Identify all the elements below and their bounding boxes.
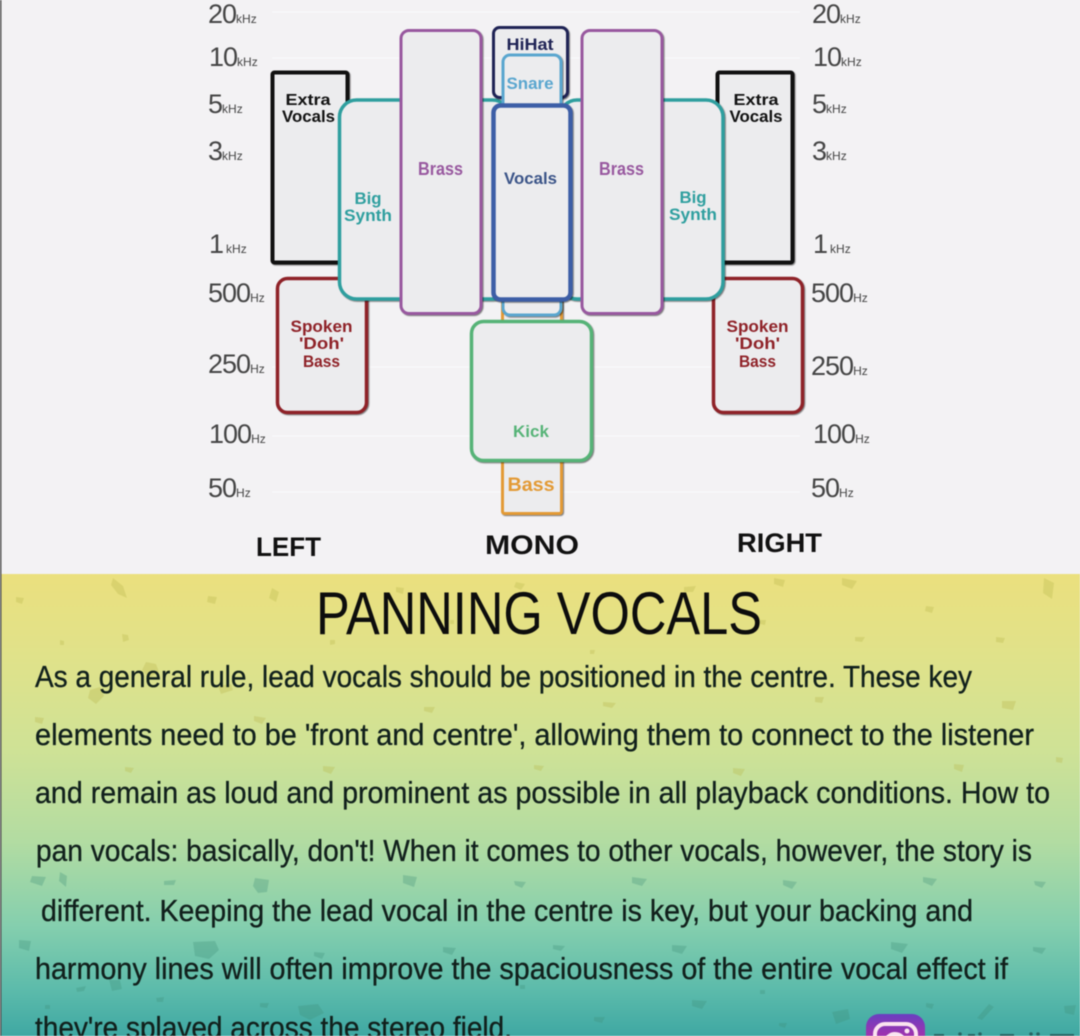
axis label: right: RIGHT [737, 528, 823, 558]
box: left big synth [340, 100, 510, 299]
box: right extra vocals: Vocals [730, 108, 782, 126]
box: bass [502, 300, 562, 514]
box: hihat [494, 28, 568, 98]
box: right spoken doh bass: Bass [739, 353, 776, 371]
box: right extra vocals: Extra [734, 92, 779, 109]
right frequency axis: 500Hz [811, 278, 868, 308]
box: snare [503, 55, 561, 315]
left frequency axis: 3kHz [208, 136, 243, 166]
left frequency axis: 1kHz [209, 229, 247, 259]
box: right brass: Brass [599, 159, 644, 179]
left frequency axis: 100Hz [209, 419, 266, 449]
cropped handle marks beside the instagram logo [934, 1032, 1074, 1036]
box: right big synth: Big [680, 188, 706, 207]
box: right spoken doh bass [714, 278, 802, 412]
right frequency axis: 100Hz [813, 419, 870, 449]
box: left big synth: Big [354, 189, 382, 208]
box: left extra vocals: Extra [286, 92, 331, 109]
box: left extra vocals [272, 72, 348, 262]
box: bass: Bass [508, 475, 554, 496]
box: right big synth [560, 100, 723, 299]
box: left spoken doh bass: 'Doh' [299, 335, 344, 353]
body paragraph: harmony lines will often improve the spaciousness of the entire vocal effect if [35, 951, 1008, 986]
right frequency axis: 5kHz [812, 89, 847, 119]
box: hihat: HiHat [506, 35, 554, 54]
right frequency axis [811, 0, 870, 503]
left frequency axis: 5kHz [208, 89, 243, 119]
right frequency axis: 250Hz [811, 351, 868, 381]
body paragraph: elements need to be 'front and centre', allowing them to connect to the listener [35, 717, 1034, 752]
box: left brass [401, 30, 481, 314]
box: right spoken doh bass: 'Doh' [735, 335, 780, 353]
left frequency axis [208, 0, 266, 503]
box: right extra vocals [718, 72, 792, 262]
text panel background [2, 574, 1080, 1036]
chart background [0, 0, 1080, 574]
left frequency axis: 50Hz [208, 473, 251, 503]
box: left extra vocals: Vocals [282, 108, 335, 126]
right frequency axis: 3kHz [812, 136, 847, 166]
right frequency axis: 50Hz [811, 473, 854, 503]
box: snare: Snare [506, 74, 554, 93]
box: left brass: Brass [418, 159, 463, 179]
box: vocals: Vocals [504, 169, 557, 188]
axis label: mono: MONO [485, 530, 579, 560]
box: kick [472, 322, 592, 460]
box: left spoken doh bass: Bass [303, 353, 340, 371]
box: vocals [494, 106, 570, 300]
left frequency axis: 10kHz [209, 42, 258, 72]
icon: instagram logo, cropped by the page edge [866, 1014, 925, 1036]
right frequency axis: 1kHz [813, 229, 851, 259]
body paragraph: As a general rule, lead vocals should be positioned in the centre. These key [35, 659, 972, 694]
box: right big synth: Synth [669, 205, 717, 224]
title: PANNING VOCALS [316, 580, 762, 647]
left frequency axis: 500Hz [208, 278, 265, 308]
axis label: left: LEFT [256, 532, 321, 562]
right frequency axis: 10kHz [813, 42, 862, 72]
body paragraph [35, 659, 1050, 1036]
box: kick: Kick [513, 422, 550, 441]
box: left spoken doh bass: Spoken [290, 317, 352, 336]
left frequency axis: 250Hz [208, 349, 265, 379]
box: right spoken doh bass: Spoken [726, 317, 788, 336]
box: right brass [582, 30, 662, 314]
body paragraph: different. Keeping the lead vocal in the centre is key, but your backing and [41, 893, 973, 928]
box: left big synth: Synth [344, 206, 392, 225]
box: left spoken doh bass [278, 278, 366, 412]
